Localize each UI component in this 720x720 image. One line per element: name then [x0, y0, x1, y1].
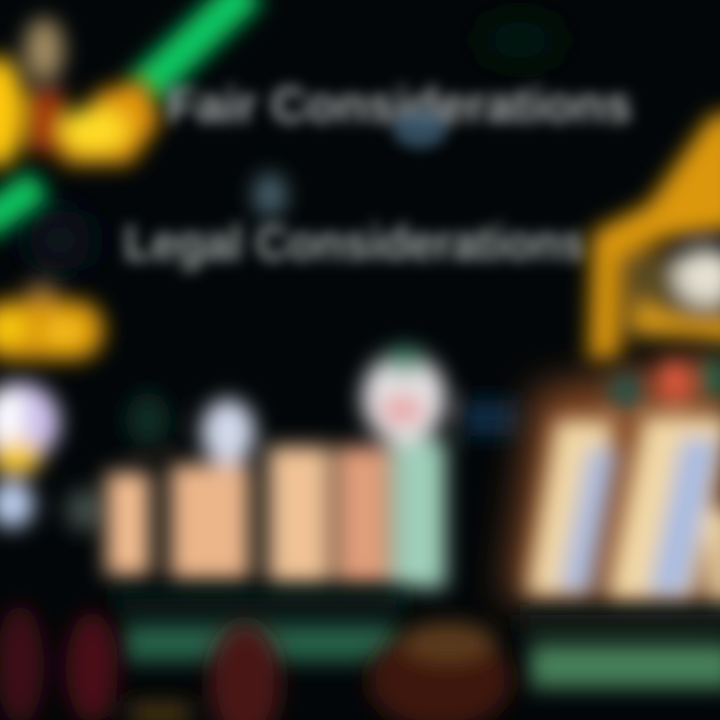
foreground audience: [0, 605, 512, 720]
right bar chart: [505, 355, 720, 602]
top left gold icon: [0, 18, 160, 168]
table strip: [110, 592, 720, 688]
versus mark: [253, 173, 287, 217]
left middle gold icon: [0, 278, 104, 360]
subheadline: Legal Considerations: [124, 215, 586, 271]
left bar chart: [106, 347, 518, 588]
background tints: [28, 20, 565, 272]
right gold frame icon: [588, 110, 720, 360]
headline: Fair Considerations: [166, 77, 632, 133]
left edge multicolour icon: [0, 382, 105, 532]
green arrow: [0, 0, 250, 226]
